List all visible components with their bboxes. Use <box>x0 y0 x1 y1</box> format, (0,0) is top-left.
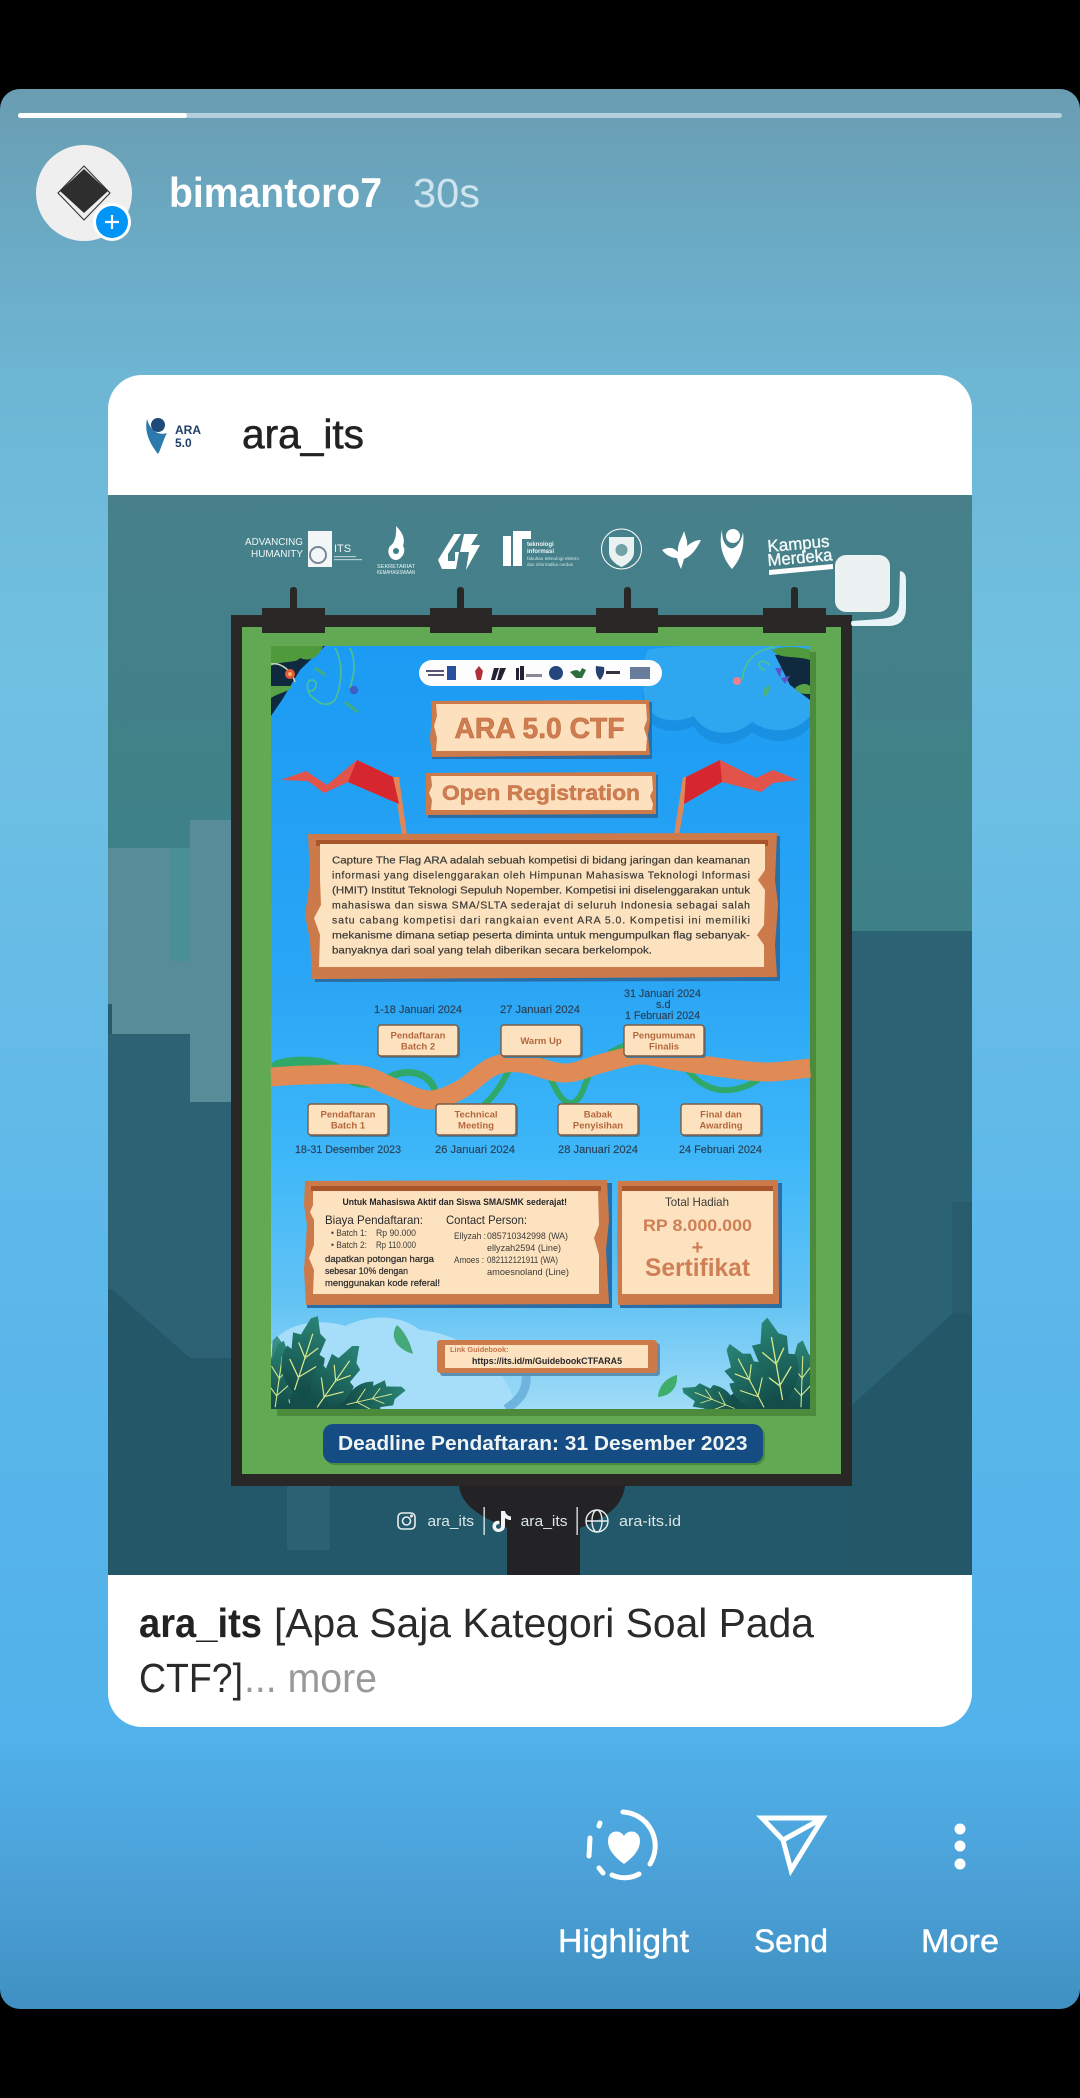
label: send: Send <box>754 1923 828 1959</box>
board: Babak Penyisihan: Penyisihan <box>573 1120 623 1132</box>
board: Pendaftaran Batch 2: Batch 2 <box>401 1042 435 1052</box>
board: Pendaftaran Batch 1: Batch 1 <box>331 1120 366 1132</box>
board: Final dan Awarding <box>681 1104 763 1137</box>
cloud and leaves bottom <box>271 1316 810 1409</box>
caption: ara_its <box>139 1600 262 1646</box>
board: Final dan Awarding: Final dan <box>700 1110 742 1120</box>
registration fee block: Biaya Pendaftaran: <box>325 1213 423 1227</box>
icon: globe <box>586 1510 608 1532</box>
board: Pengumuman Finalis: Finalis <box>649 1042 679 1052</box>
logo: sekretariat kemahasiswaan: SEKRETARIAT <box>377 564 415 570</box>
icon: three dots <box>954 1824 966 1870</box>
foliage and butterfly top right corner <box>733 647 810 700</box>
sponsor logos row <box>245 526 834 576</box>
poster artwork <box>257 645 819 1423</box>
timeline vines <box>271 1045 810 1104</box>
story age: 30s <box>413 170 480 216</box>
red flag left <box>281 760 407 835</box>
title board: ARA 5.0 CTF <box>430 700 652 759</box>
label: more: More <box>921 1923 999 1959</box>
account logo: ARA <box>175 423 201 437</box>
registration fee block: Rp 110.000 <box>376 1240 416 1251</box>
guidebook link board <box>437 1340 660 1376</box>
logo: teknologi informasi: dan informatika cerdas <box>527 562 574 567</box>
description text: mahasiswa dan siswa SMA/SLTA sederajat di seluruh Indonesia sebagai salah <box>332 900 750 912</box>
logo: advancing humanity ITS: ADVANCING <box>245 537 303 548</box>
vines and flowers top left <box>307 648 358 712</box>
board: Pendaftaran Batch 2: Pendaftaran <box>391 1030 446 1042</box>
board: Pendaftaran Batch 1 <box>308 1104 390 1137</box>
icon: send <box>762 1818 823 1870</box>
registration fee block <box>325 1213 440 1289</box>
registration fee block: • Batch 2: <box>331 1240 367 1251</box>
timeline dates bottom row: 24 Februari 2024 <box>679 1144 762 1156</box>
contact person block: ellyzah2594 (Line) <box>487 1243 561 1254</box>
registration fee block: menggunakan kode referal! <box>325 1278 440 1289</box>
board: Babak Penyisihan: Babak <box>584 1110 613 1120</box>
partner logo pill <box>419 660 662 686</box>
label: highlight: Highlight <box>558 1923 689 1959</box>
description text <box>332 854 751 956</box>
registration fee block: sebesar 10% dengan <box>325 1266 408 1277</box>
account name: ara_its <box>242 411 364 457</box>
timeline dates bottom row: 26 Januari 2024 <box>435 1144 515 1156</box>
board: Final dan Awarding: Awarding <box>699 1120 743 1132</box>
description text: Capture The Flag ARA adalah sebuah kompetisi di bidang jaringan dan keamanan <box>332 854 750 866</box>
handle: instagram: ara_its <box>428 1514 474 1530</box>
username: bimantoro7 <box>169 169 382 216</box>
prize board <box>617 1180 782 1308</box>
info board <box>304 1180 612 1308</box>
cloud top right <box>642 645 810 744</box>
contact person block: Amoes : <box>454 1255 484 1266</box>
board: Warm Up <box>501 1025 583 1058</box>
logo: teknologi informasi: fakultas teknologi elektro <box>527 556 580 561</box>
timeline dates bottom row <box>296 1144 762 1154</box>
description text: satu cabang kompetisi dari rangkaian event ARA 5.0. Kompetisi ini memiliki <box>332 914 750 926</box>
contact person block: Ellyzah : <box>454 1231 486 1242</box>
timeline dates top row: 31 Januari 2024 <box>624 988 701 1000</box>
city silhouette <box>108 820 972 1575</box>
board: Pengumuman Finalis: Pengumuman <box>633 1030 696 1042</box>
prize board: Sertifikat <box>645 1254 751 1282</box>
logo: teknologi informasi <box>503 531 580 567</box>
guidebook link board: Link Guidebook: <box>450 1345 509 1354</box>
description text: (HMIT) Institut Teknologi Sepuluh Nopember. Kompetisi ini diselenggarakan untuk <box>332 884 751 896</box>
subtitle board: Open Registration: Open Registration <box>442 782 640 805</box>
contact person block: 085710342998 (WA) <box>487 1231 568 1242</box>
logo: kampus merdeka: Merdeka <box>767 545 834 570</box>
icon: highlight <box>589 1812 655 1878</box>
deadline banner: Deadline Pendaftaran: 31 Desember 2023 <box>338 1433 748 1455</box>
action: more <box>921 1824 999 1959</box>
description text: mekanisme dimana setiap peserta diminta untuk mengumpulkan flag sebanyak- <box>332 930 751 942</box>
prize board: + <box>692 1237 703 1259</box>
timeline dates top row: 1-18 Januari 2024 <box>374 1004 462 1016</box>
board: Babak Penyisihan <box>558 1104 640 1137</box>
contact person block: amoesnoland (Line) <box>487 1267 569 1278</box>
poster image <box>108 495 972 1575</box>
social handles <box>398 1507 681 1535</box>
description board <box>305 833 780 982</box>
logo: sekretariat kemahasiswaan <box>377 526 415 576</box>
timeline dates bottom row: 28 Januari 2024 <box>558 1144 638 1156</box>
billboard mounts <box>290 587 798 608</box>
story progress bar <box>18 113 1062 118</box>
contact person block <box>446 1213 569 1278</box>
logo: advancing humanity ITS: HUMANITY <box>251 549 303 560</box>
prize board: Total Hadiah <box>665 1195 729 1209</box>
contact person block: 082112121911 (WA) <box>487 1255 558 1266</box>
multi-photo badge <box>835 555 906 626</box>
timeline dates top row: s.d <box>656 999 671 1011</box>
registration fee block: • Batch 1: <box>331 1228 367 1239</box>
account logo <box>146 418 201 454</box>
logo: G5 <box>438 534 480 570</box>
caption: [Apa Saja Kategori Soal Pada <box>274 1600 814 1646</box>
logo: kampus merdeka <box>768 538 833 575</box>
account logo: 5.0 <box>175 436 192 450</box>
guidebook link board: https://its.id/m/GuidebookCTFARA5 <box>472 1356 622 1366</box>
caption: ... more <box>244 1655 377 1701</box>
board: Technical Meeting: Technical <box>454 1110 498 1120</box>
timeline dates bottom row: 18-31 Desember 2023 <box>295 1144 401 1156</box>
logo: teknologi informasi: informasi <box>527 549 554 555</box>
deadline banner <box>323 1424 765 1465</box>
eligibility note: Untuk Mahasiswa Aktif dan Siswa SMA/SMK sederajat! <box>342 1197 567 1207</box>
board: Pendaftaran Batch 1: Pendaftaran <box>321 1110 376 1120</box>
board: Warm Up: Warm Up <box>520 1036 562 1047</box>
caption <box>139 1600 814 1701</box>
shared post card <box>108 375 972 1727</box>
caption: CTF?] <box>139 1655 243 1701</box>
board: Technical Meeting <box>436 1104 518 1137</box>
registration fee block: Rp 90.000 <box>376 1228 416 1239</box>
icon: instagram <box>398 1513 415 1529</box>
logo: teknologi informasi: teknologi <box>527 542 554 548</box>
timeline dates top row: 1 Februari 2024 <box>625 1010 700 1022</box>
action: highlight <box>558 1812 689 1959</box>
registration fee block: dapatkan potongan harga <box>325 1254 435 1265</box>
logo: HMIT shield <box>602 529 642 569</box>
prize board: RP 8.000.000 <box>643 1216 752 1235</box>
profile avatar with add badge <box>36 145 132 241</box>
billboard post <box>459 1486 625 1575</box>
logo: advancing humanity ITS: ITS <box>334 543 351 555</box>
foliage top left corner <box>271 646 325 716</box>
logo: ARA pin <box>721 529 743 569</box>
timeline dates top row <box>374 988 701 1022</box>
title board: ARA 5.0 CTF: ARA 5.0 CTF <box>454 713 624 745</box>
contact person block: Contact Person: <box>446 1213 527 1227</box>
red flag right <box>674 760 798 835</box>
handle: website: ara-its.id <box>619 1514 681 1530</box>
subtitle board: Open Registration <box>426 772 658 818</box>
board: Technical Meeting: Meeting <box>458 1120 494 1132</box>
icon: tiktok <box>492 1511 511 1532</box>
logo: kampus merdeka: Kampus <box>767 532 830 556</box>
description text: informasi yang diselenggarakan oleh Himpunan Mahasiswa Teknologi Informasi <box>332 870 750 882</box>
description text: banyaknya dari soal yang telah diberikan secara berkelompok. <box>332 944 652 956</box>
board: Pendaftaran Batch 2 <box>378 1025 460 1058</box>
handle: tiktok: ara_its <box>521 1514 568 1530</box>
timeline boards <box>308 1025 763 1137</box>
logo: advancing humanity ITS <box>245 531 362 567</box>
action: send <box>754 1818 828 1959</box>
timeline dates top row: 27 Januari 2024 <box>500 1004 580 1016</box>
logo: sekretariat kemahasiswaan: KEMAHASISWAAN <box>377 570 415 576</box>
logo: lotus <box>662 531 701 569</box>
board: Pengumuman Finalis <box>624 1025 706 1058</box>
billboard frame <box>231 608 852 1486</box>
